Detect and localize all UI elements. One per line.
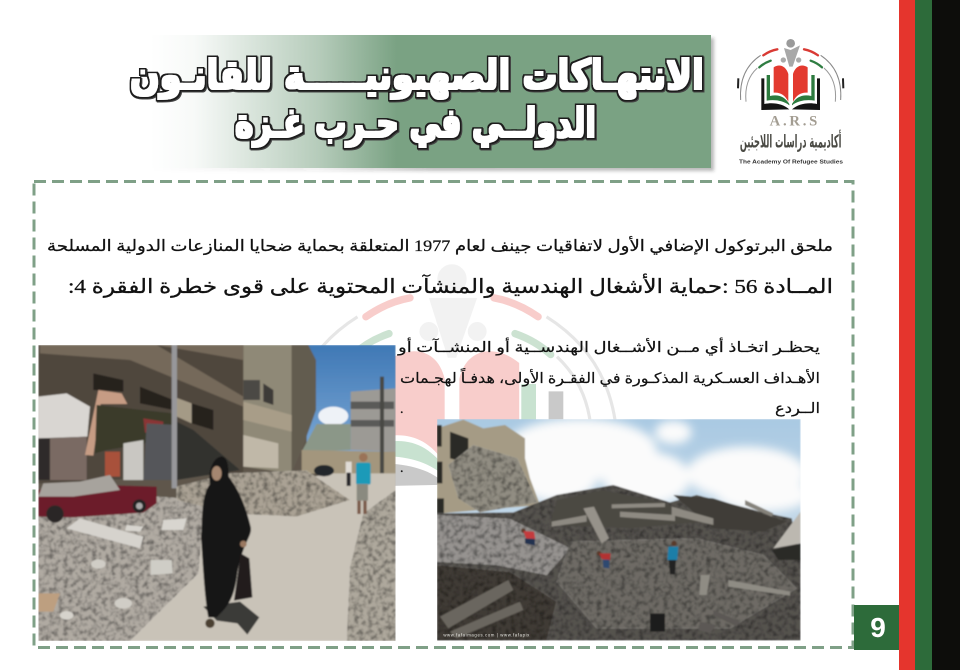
fallen slabs bbox=[440, 580, 523, 638]
photo credit: www.fafaimages.com | www.fafapix bbox=[443, 632, 530, 637]
article paragraph: الأهـداف العسـكرية المذكـورة في الفقـرة الأولى، هدفـاً لهجـمات bbox=[400, 368, 820, 387]
concrete slabs bbox=[67, 518, 143, 548]
side stripes bbox=[899, 0, 960, 670]
article paragraph: الــردع bbox=[775, 401, 820, 417]
heading line 2: الدولــي في حـرب غـزة bbox=[235, 99, 596, 148]
man in blue shirt bbox=[359, 453, 368, 462]
article paragraph: . bbox=[400, 402, 404, 417]
hanging laundry bbox=[38, 393, 90, 438]
dashed content frame bbox=[34, 182, 853, 648]
article paragraph: . bbox=[400, 461, 404, 476]
woman bbox=[203, 602, 259, 635]
slide: أكاديمية دراسات اللاجئين bbox=[740, 129, 841, 152]
road bbox=[120, 473, 396, 641]
logo initials: A.R.S bbox=[770, 114, 818, 130]
rubble bbox=[38, 497, 205, 641]
article 56 heading text: المــادة 56 :حماية الأشغال الهندسية والمنشآت المحتوية على قوى خطرة الفقرة 4: bbox=[68, 273, 833, 298]
article paragraph: يحظـر اتخـاذ أي مــن الأشــغال الهندســية أو المنشــآت أو bbox=[397, 337, 820, 356]
child bending bbox=[597, 551, 601, 556]
title banner bbox=[130, 35, 714, 171]
heading line 1: الانتهـاكات الصهيونيـــــة للقانـون bbox=[130, 51, 704, 99]
logo english name: The Academy Of Refugee Studies bbox=[739, 160, 843, 166]
standing building bbox=[437, 420, 540, 514]
main building bbox=[38, 345, 243, 483]
page number: 9 bbox=[870, 612, 886, 643]
main debris bbox=[437, 485, 801, 641]
protocol heading text: ملحق البرتوكول الإضافي الأول لاتفاقيات جينف لعام 1977 المتعلقة بحماية ضحايا المنازعات الدولية المسلحة bbox=[47, 236, 833, 256]
logo: Academy of Refugee Studies bbox=[738, 39, 843, 166]
child in red bbox=[521, 528, 526, 533]
photo: woman walking through rubble bbox=[38, 345, 396, 641]
wrecked car bbox=[38, 484, 157, 517]
photo: children on collapsed building bbox=[437, 418, 810, 641]
page number bbox=[854, 605, 899, 650]
clouds bbox=[503, 418, 810, 512]
distant buildings bbox=[351, 388, 396, 452]
article paragraph bbox=[397, 337, 820, 476]
watermark: faded academy logo bbox=[287, 264, 617, 487]
child in blue bbox=[671, 541, 677, 546]
